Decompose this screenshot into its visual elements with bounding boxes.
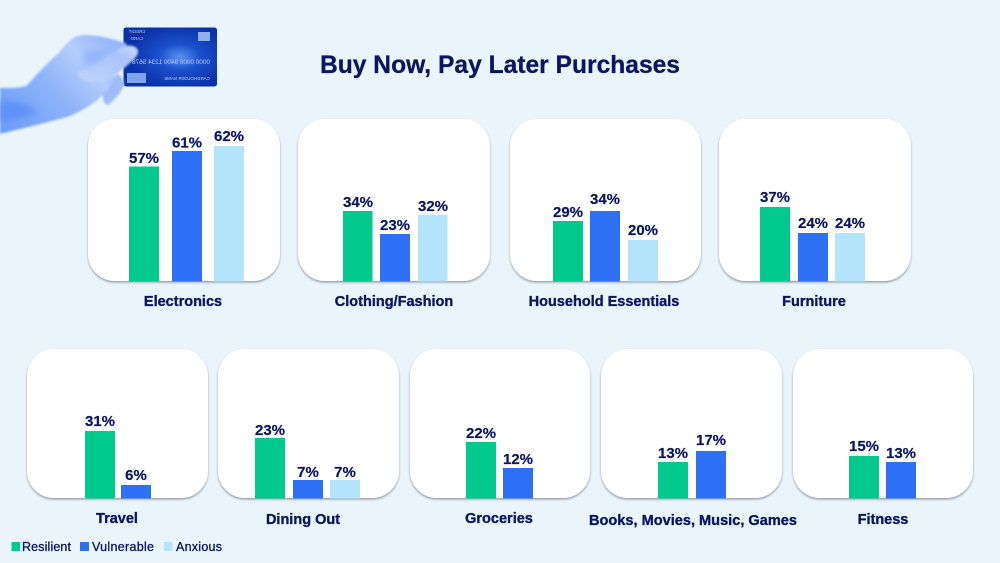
bar: Household Resilient 29%: [553, 204, 583, 282]
bar: Household Anxious 20%: 20%: [628, 222, 658, 239]
bar: Books Resilient 13%: [658, 445, 688, 498]
bar: Furniture Resilient 37%: [760, 189, 790, 282]
category label: Dining Out: [266, 512, 340, 528]
bar: Groceries Vulnerable 12%: [503, 451, 533, 498]
panel: Household Essentials: [510, 119, 701, 310]
bar: Electronics Anxious 62%: [214, 128, 244, 282]
bar: Dining Vulnerable 7%: 7%: [297, 464, 319, 481]
credit card: [124, 28, 217, 86]
hand: [0, 35, 138, 134]
bar: Electronics Resilient 57%: [129, 150, 159, 282]
bar: Dining Resilient 23%: 23%: [255, 422, 285, 439]
category label: Clothing/Fashion: [335, 294, 453, 310]
bar: Furniture Anxious 24%: 24%: [835, 215, 865, 232]
credit card: 0000 0000 8400 1234 5678: [132, 59, 210, 66]
panel: Fitness: [793, 349, 973, 528]
bar: Dining Anxious 7%: 7%: [334, 464, 356, 481]
bar: Dining Resilient 23%: [255, 422, 285, 498]
bar: Travel Vulnerable 6%: [121, 467, 151, 498]
panel: Electronics: [88, 119, 280, 310]
bar: Furniture Resilient 37%: 37%: [760, 189, 790, 206]
category label: Travel: [96, 511, 138, 527]
panel: Books, Movies, Music, Games: [589, 349, 797, 529]
category label: Household Essentials: [529, 294, 679, 310]
bar: Groceries Resilient 22%: [466, 425, 496, 498]
bar: Groceries Vulnerable 12%: 12%: [503, 451, 533, 468]
bar: Books Vulnerable 17%: 17%: [696, 432, 726, 449]
bar: Furniture Vulnerable 24%: 24%: [798, 215, 828, 232]
bar: Clothing Anxious 32%: 32%: [418, 198, 448, 215]
category label: Furniture: [782, 294, 846, 310]
bar: Fitness Vulnerable 13%: [886, 445, 916, 498]
credit card: CARDHOLDER NAME: [164, 76, 210, 81]
bar: Fitness Vulnerable 13%: 13%: [886, 445, 916, 462]
bar: Clothing Vulnerable 23%: 23%: [380, 217, 410, 234]
bar: Clothing Resilient 34%: 34%: [343, 194, 373, 211]
legend: Anxious: Anxious: [176, 540, 222, 554]
bar: Books Vulnerable 17%: [696, 432, 726, 498]
panel: Furniture: [719, 119, 911, 310]
bar: Electronics Anxious 62%: 62%: [214, 128, 244, 145]
legend: Vulnerable: Vulnerable: [92, 540, 154, 554]
bar: Furniture Vulnerable 24%: [798, 215, 828, 282]
bar: Fitness Resilient 15%: [849, 438, 879, 498]
credit card: CARD: [130, 36, 143, 41]
category label: Electronics: [144, 294, 222, 310]
bar: Household Vulnerable 34%: [590, 191, 620, 282]
bar: Clothing Resilient 34%: [343, 194, 373, 282]
bar: Clothing Anxious 32%: [418, 198, 448, 282]
panel: Dining Out: [218, 349, 399, 528]
category label: Groceries: [465, 511, 533, 527]
legend: [12, 540, 222, 554]
bar: Travel Resilient 31%: [85, 413, 115, 498]
illustration: hand holding credit card: [0, 28, 217, 134]
legend: Resilient: Resilient: [22, 540, 72, 554]
bar: Household Anxious 20%: [628, 222, 658, 282]
bar: Household Vulnerable 34%: 34%: [590, 191, 620, 208]
credit card: CREDIT: [128, 29, 145, 34]
bar: Travel Resilient 31%: 31%: [85, 413, 115, 430]
panel: Travel: [27, 349, 208, 527]
bar: Clothing Vulnerable 23%: [380, 217, 410, 282]
bar: Electronics Vulnerable 61%: 61%: [172, 134, 202, 152]
bar: Travel Vulnerable 6%: 6%: [125, 467, 147, 484]
bar: Fitness Resilient 15%: 15%: [849, 438, 879, 455]
title: Buy Now, Pay Later Purchases: [320, 51, 680, 79]
bar: Dining Anxious 7%: [330, 464, 360, 498]
category label: Books, Movies, Music, Games: [589, 513, 797, 529]
bar: Electronics Vulnerable 61%: [172, 134, 202, 282]
bar: Groceries Resilient 22%: 22%: [466, 425, 496, 442]
panel: Clothing/Fashion: [298, 119, 490, 310]
bar: Electronics Resilient 57%: 57%: [129, 150, 159, 167]
bar: Dining Vulnerable 7%: [293, 464, 323, 498]
category label: Fitness: [858, 512, 908, 528]
panel: Groceries: [410, 349, 590, 527]
bar: Household Resilient 29%: 29%: [553, 204, 583, 221]
bar: Furniture Anxious 24%: [835, 215, 865, 282]
bar: Books Resilient 13%: 13%: [658, 445, 688, 462]
